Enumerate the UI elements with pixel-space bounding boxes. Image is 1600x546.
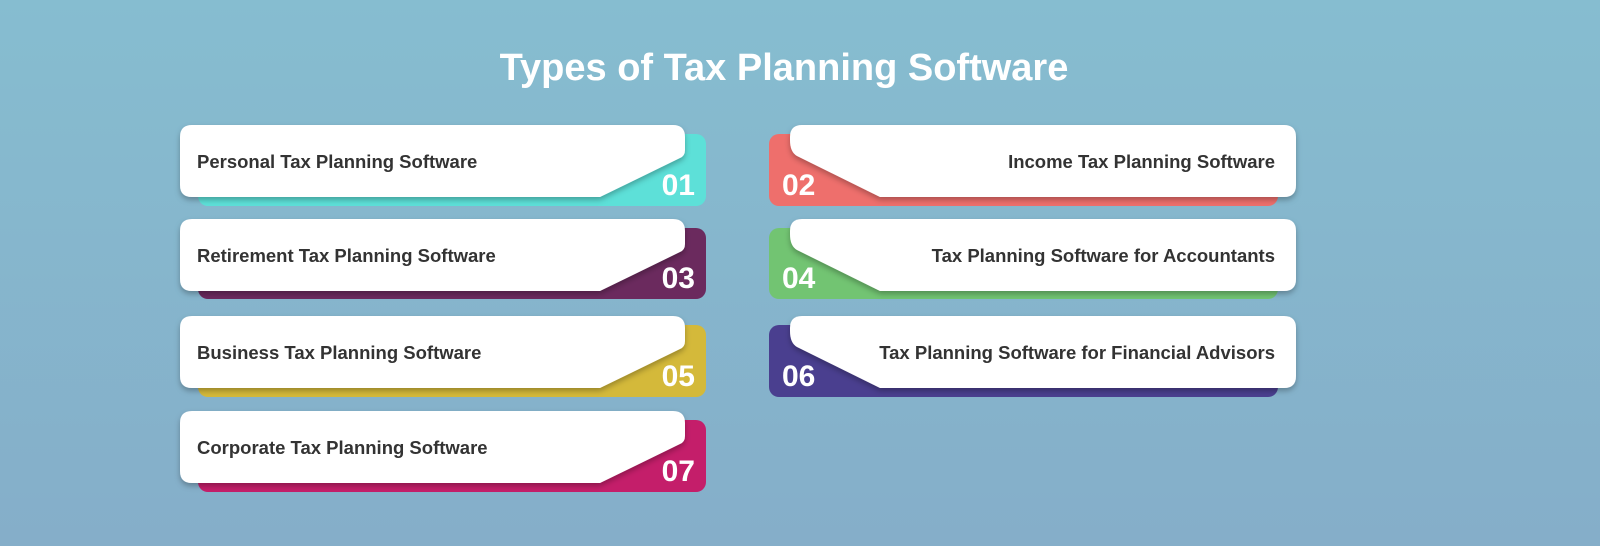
- card 02: [769, 125, 1296, 206]
- card 04: Tax Planning Software for Accountants: [932, 245, 1275, 266]
- card 03: 03: [662, 262, 695, 295]
- card 04: 04: [782, 262, 816, 295]
- card 06: Tax Planning Software for Financial Advisors: [879, 342, 1275, 363]
- card 01: 01: [662, 169, 695, 202]
- card 03: [180, 219, 706, 299]
- card 05: 05: [662, 360, 695, 393]
- card 07: Corporate Tax Planning Software: [197, 437, 488, 458]
- card 01: [180, 125, 706, 206]
- card 07: 07: [662, 455, 695, 488]
- card 03: Retirement Tax Planning Software: [197, 245, 496, 266]
- card 02: Income Tax Planning Software: [1008, 151, 1275, 172]
- card 05: [180, 316, 706, 397]
- card 06: [769, 316, 1296, 397]
- card 05: Business Tax Planning Software: [197, 342, 481, 363]
- card 07: [180, 411, 706, 492]
- card 06: 06: [782, 360, 815, 393]
- card 04: [769, 219, 1296, 299]
- title: Types of Tax Planning Software: [500, 47, 1068, 89]
- card 02: 02: [782, 169, 815, 202]
- card 01: Personal Tax Planning Software: [197, 151, 477, 172]
